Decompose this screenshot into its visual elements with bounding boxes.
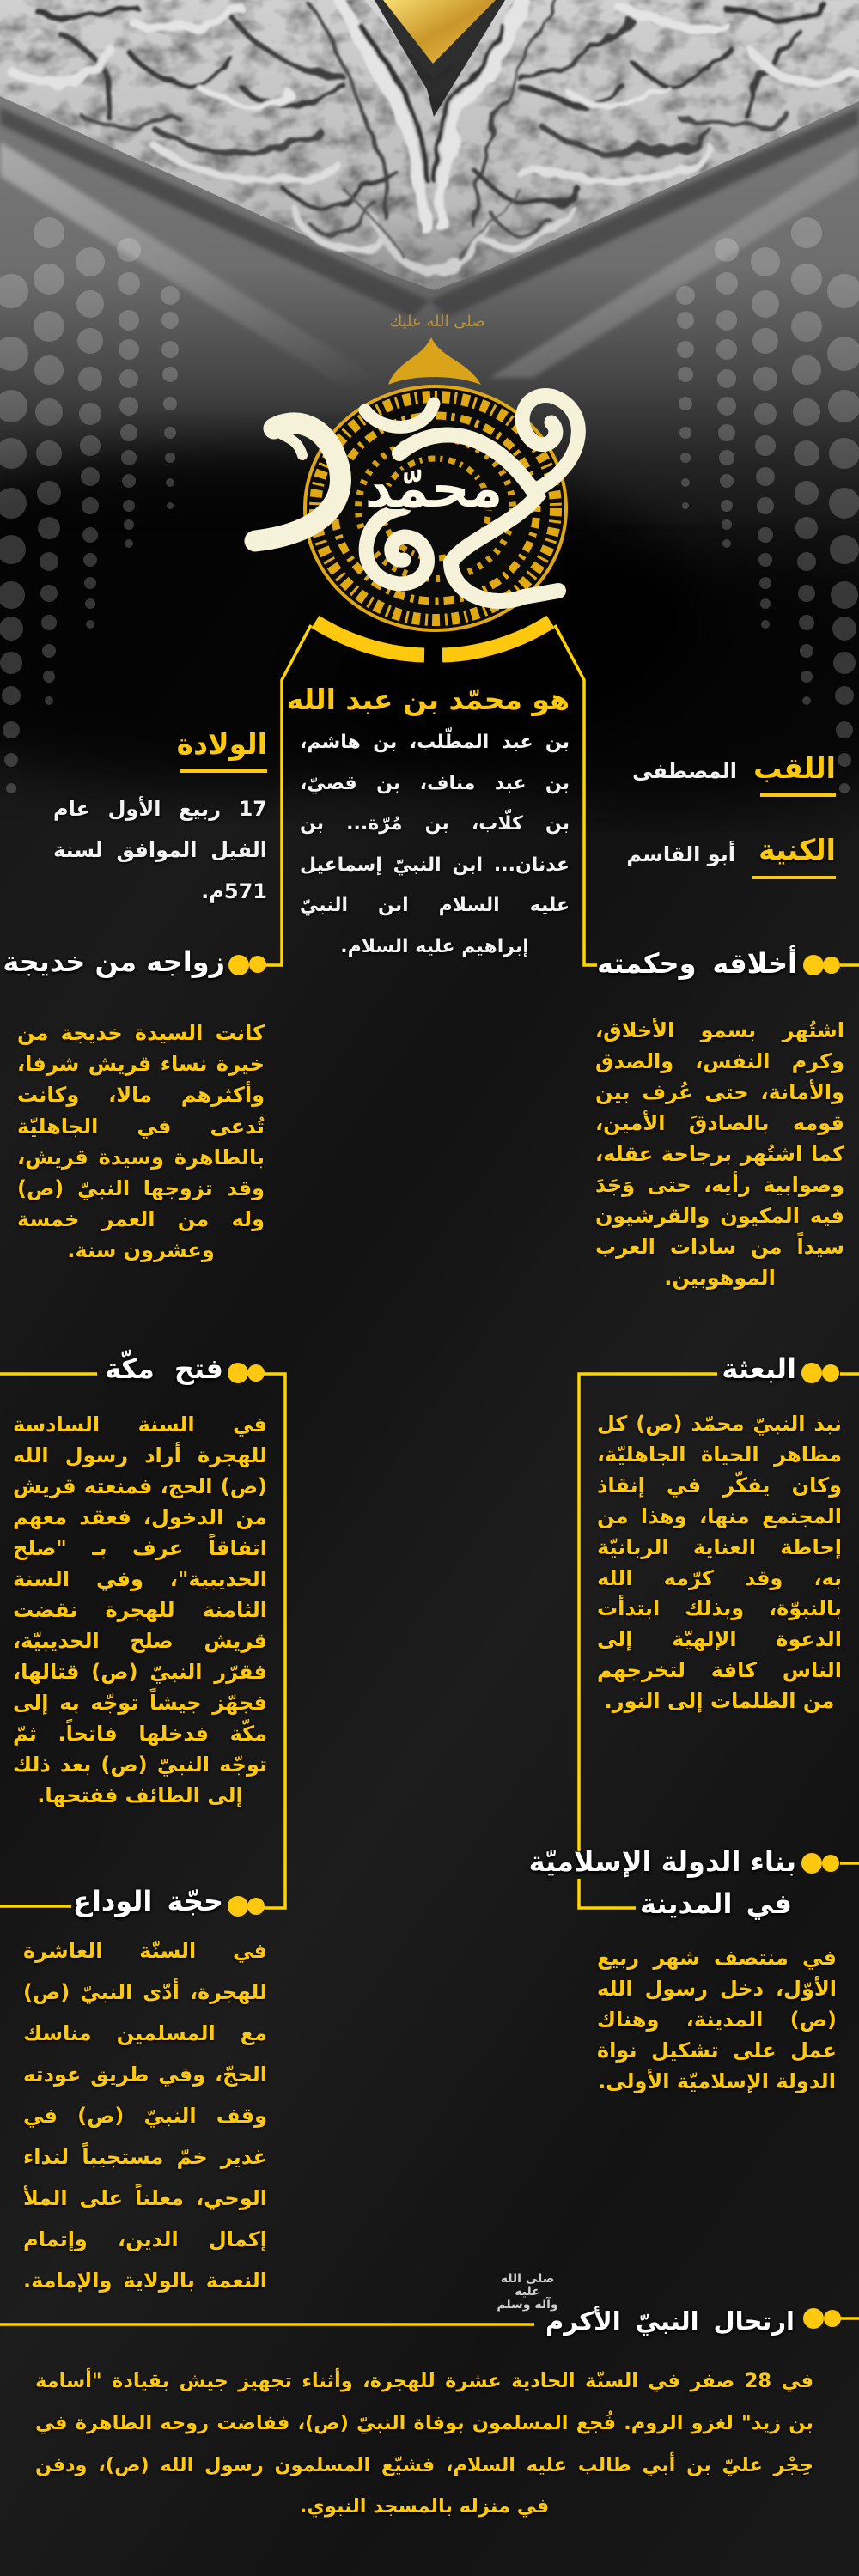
text: farewell pilgrimage: غدير خمّ مستجيباً لنداء [23, 2145, 267, 2169]
text: morals: قومه بالصادقَ الأمين، [595, 1111, 844, 1135]
heading: kunya: الكنية [758, 833, 836, 866]
text: state building: الدولة الإسلاميّة الأولى. [598, 2069, 836, 2093]
text: passing of the Prophet: في منزله بالمسجد النبوي. [300, 2495, 549, 2518]
heading: mission: البعثة [722, 1352, 796, 1385]
text: conquest of Mecca [13, 1413, 267, 1808]
value: title: المصطفى [632, 759, 737, 783]
text: lineage [300, 727, 570, 958]
dots: headings [228, 955, 841, 2329]
text: passing of the Prophet [35, 2368, 813, 2518]
text: marriage: وقد تزوجها النبيّ (ص) [17, 1176, 265, 1200]
text: farewell pilgrimage: للهجرة، أدّى النبيّ (ص) [23, 1980, 267, 2004]
text: birth: 571م. [201, 879, 267, 903]
text: marriage: وله من العمر خمسة [17, 1207, 265, 1231]
text: passing of the Prophet: في 28 صفر في السنّة الحادية عشرة للهجرة، وأثناء تجهيز جيش بقيادة "أسامة [35, 2370, 813, 2392]
text: conquest of Mecca: إلى الطائف ففتحها. [37, 1783, 243, 1807]
text: marriage: كانت السيدة خديجة من [17, 1021, 265, 1045]
text: lineage: عدنان... ابن النبيّ إسماعيل [300, 854, 570, 876]
heading: morals: أخلاقه وحكمته [597, 947, 797, 980]
text: state building: الأوّل، دخل رسول الله [597, 1977, 837, 2001]
text: lineage: بن كلّاب، بن مُرّة... بن [300, 813, 570, 835]
text: passing of the Prophet: بن زيد" لغزو الروم. فُجع المسلمون بوفاة النبيّ (ص)، ففاضت روحه الطاهرة في [35, 2412, 813, 2434]
text: conquest of Mecca: (ص) الحج، فمنعته قريش [13, 1474, 267, 1498]
text: marriage: خيرة نساء قريش شرفا، [17, 1052, 265, 1076]
underline: title [760, 793, 836, 797]
text: morals [595, 1018, 844, 1291]
text: conquest of Mecca: توجّه النبيّ (ص) بعد ذلك [13, 1753, 267, 1777]
small calligraphy: salutation: صلى الله [501, 2272, 554, 2286]
text: mission: وكان يفكّر في إنقاذ [597, 1473, 842, 1498]
halftone dots right [676, 217, 859, 793]
text: mission: إحاطة العناية الربانيّة [597, 1535, 842, 1559]
heading: farewell pilgrimage: حجّة الوداع [73, 1885, 223, 1917]
text: state building: (ص) المدينة، وهناك [597, 2008, 837, 2032]
heading: birth: الولادة [177, 727, 267, 761]
text: conquest of Mecca: فجهّز جيشاً توجّه به إلى [13, 1691, 267, 1715]
decorative calligraphic swirls [255, 396, 578, 601]
text: state building: في منتصف شهر ربيع [597, 1946, 837, 1970]
small calligraphy: salutation: وآله وسلم [497, 2296, 558, 2312]
text: conquest of Mecca: من الدخول، فعقد معهم [13, 1505, 267, 1529]
medallion [305, 337, 566, 630]
frame: conquest of Mecca [0, 1374, 285, 1908]
text: conquest of Mecca: فقرّر النبيّ (ص) قتالها، [13, 1660, 267, 1684]
icon: gold gem [364, 0, 515, 117]
small calligraphy: blessing: صلى الله عليك [389, 313, 485, 331]
text: farewell pilgrimage: وقف النبيّ (ص) في [23, 2104, 267, 2128]
black smoke texture [0, 447, 704, 790]
text: lineage: بن عبد المطّلب، بن هاشم، [300, 732, 570, 753]
text: morals: والأمانة، حتى عُرف بين [595, 1080, 844, 1104]
text: mission: مظاهر الحياة الجاهليّة، [597, 1443, 842, 1467]
text: lineage: عليه السلام ابن النبيّ [300, 895, 570, 916]
text: birth: 17 ربيع الأول عام [53, 797, 267, 821]
text: farewell pilgrimage: إكمال الدين، وإتمام [23, 2227, 267, 2251]
text: morals: وكرم النفس، والصدق [595, 1049, 844, 1073]
underline: kunya [752, 876, 836, 879]
halftone dots left [0, 217, 180, 793]
small calligraphy: salutation [497, 2272, 558, 2312]
text: lineage: إبراهيم عليه السلام. [340, 936, 529, 957]
text: state building: عمل على تشكيل نواة [597, 2038, 837, 2063]
frame: farewell [0, 2318, 859, 2324]
value: kunya: أبو القاسم [626, 842, 735, 866]
text: morals: سيداً من سادات العرب [595, 1235, 844, 1259]
text: marriage: وأكثرهم مالا، وكانت [17, 1083, 265, 1107]
text: marriage [17, 1021, 265, 1264]
text: farewell pilgrimage: مع المسلمين مناسك [23, 2021, 267, 2045]
text: farewell pilgrimage: الوحي، معلناً على الملأ [23, 2186, 267, 2210]
text: morals: كما اشتُهر برجاحة عقله، [595, 1142, 844, 1166]
text: mission: بالنبوّة، وبذلك ابتدأت [597, 1596, 842, 1620]
centre frame line [0, 625, 859, 2324]
text: mission: من الظلمات إلى النور. [605, 1689, 834, 1713]
title: calligraphic name: محمّد [365, 457, 503, 519]
text: marriage: تُدعى في الجاهليّة [17, 1115, 265, 1139]
text: conquest of Mecca: في السنة السادسة [13, 1413, 267, 1437]
heading: name: هو محمّد بن عبد الله [287, 683, 570, 716]
text: farewell pilgrimage: الحجّ، وفي طريق عودته [23, 2063, 267, 2087]
frame: mission [579, 1374, 859, 1908]
arc right [442, 622, 551, 655]
text: conquest of Mecca: اتفاقاً عرف بـ "صلح [13, 1536, 267, 1560]
text: lineage: بن عبد مناف، بن قصيّ، [300, 773, 570, 794]
text: marriage: وعشرون سنة. [67, 1238, 215, 1262]
text: morals: وصوابية رأيه، حتى وَجَدَ [595, 1173, 844, 1197]
arc left [315, 622, 424, 655]
text: farewell pilgrimage: في السنّة العاشرة [23, 1939, 267, 1963]
text: mission: الناس كافة لتخرجهم [597, 1658, 842, 1682]
text: conquest of Mecca: للهجرة أراد رسول الله [13, 1443, 267, 1467]
heading: marriage: زواجه من خديجة [3, 945, 225, 978]
heading: state building line 1: بناء الدولة الإسلاميّة [529, 1845, 796, 1878]
text: marriage: بالطاهرة وسيدة قريش، [17, 1145, 265, 1170]
text: mission: المجتمع منها، وهذا من [597, 1504, 842, 1528]
text: birth: الفيل الموافق لسنة [53, 838, 267, 862]
text: conquest of Mecca: الثامنة للهجرة نقضت [13, 1598, 267, 1622]
grey gradient backdrop [0, 0, 859, 532]
text: mission [597, 1412, 842, 1714]
small calligraphy: salutation: عليه [515, 2285, 540, 2299]
heading: state building line 2: في المدينة [640, 1887, 792, 1920]
text: conquest of Mecca: قريش صلح الحديبيّة، [13, 1629, 267, 1653]
text: mission: نبذ النبيّ محمّد (ص) كل [597, 1412, 842, 1436]
text: morals: اشتُهر بسمو الأخلاق، [595, 1018, 844, 1042]
text: morals: فيه المكيون والقرشيون [595, 1204, 844, 1228]
heading: title: اللقب [753, 751, 836, 785]
text: mission: الدعوة الإلهيّة إلى [597, 1627, 842, 1651]
text: state building [597, 1946, 837, 2095]
ornament swirls [9, 0, 854, 275]
text: conquest of Mecca: الحديبية"، وفي السنة [13, 1567, 267, 1591]
heading: passing of the Prophet: ارتحال النبيّ الأكرم [545, 2306, 795, 2336]
text: farewell pilgrimage [23, 1939, 267, 2294]
text: passing of the Prophet: حِجْر عليّ بن أبي طالب عليه السلام، فشيّع المسلمون رسول الله (ص)، ودفن [35, 2454, 813, 2476]
diagonal light bands [0, 107, 859, 386]
text: conquest of Mecca: مكّة فدخلها فاتحاً. ثمّ [13, 1722, 267, 1746]
text: farewell pilgrimage: النعمة بالولاية والإمامة. [23, 2269, 267, 2293]
text: mission: به، وقد كرّمه الله [597, 1566, 842, 1590]
underline: birth [180, 769, 267, 773]
text: morals: الموهوبين. [664, 1266, 776, 1290]
text: birth [53, 796, 267, 904]
ornament panel [0, 0, 859, 290]
heading: conquest of Mecca: فتح مكّة [105, 1352, 223, 1385]
